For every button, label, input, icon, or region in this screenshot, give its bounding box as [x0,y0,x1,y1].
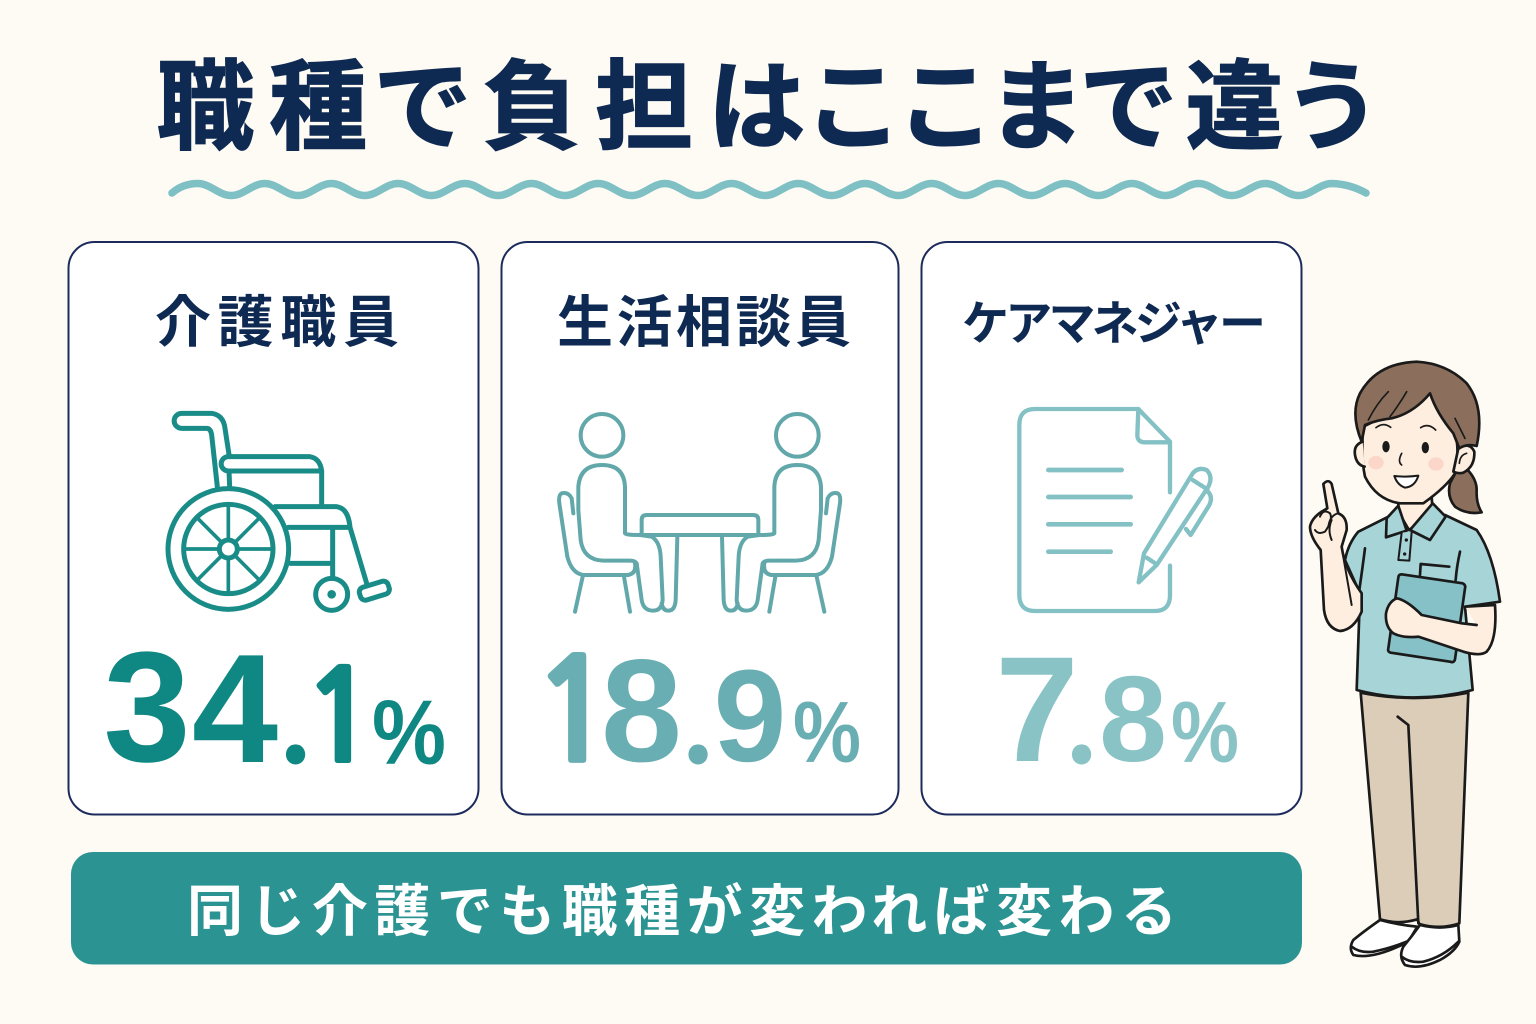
raised arm and pointing hand [1310,481,1362,631]
heading: counselor: 生活相談員 [557,291,851,354]
value: 7.8%: % [1171,685,1239,781]
pants [1361,693,1468,927]
value: 34.1%: . [278,642,313,794]
wavy underline [172,184,1366,196]
neck [1398,497,1433,530]
illustration: care worker character [1310,362,1500,967]
ponytail [1449,471,1482,513]
title: 職種で負担はここまで違う [156,52,1382,162]
value: 7.8%: 8 [1099,651,1167,787]
value: 7.8%: . [1064,642,1099,794]
value: 34.1%: 1 [302,655,378,780]
face [1362,393,1457,503]
value: 34.1%: 3 [103,620,191,795]
value: 7.8%: 7 [995,625,1079,793]
card background [922,242,1302,814]
heading: care manager: ケアマネジャー [962,297,1266,350]
icon: document and pen [1019,409,1211,611]
facial features [1368,456,1384,469]
value: 18.9%: 9 [714,642,786,789]
value: 18.9%: % [793,685,861,781]
banner [71,852,1302,964]
value: 18.9%: . [681,642,715,794]
forearm and holding hand [1386,598,1495,654]
value: 18.9% [531,629,861,794]
value: 7.8% [995,625,1239,794]
shoes [1351,920,1417,956]
panel: counselor [502,242,898,814]
value: 34.1% [103,620,446,795]
icon: two people at table [559,414,840,612]
value: 18.9%: 8 [601,629,682,792]
value: 18.9%: 1 [531,643,617,783]
collar [1386,506,1407,537]
value: 34.1%: 4 [192,622,278,795]
shirt [1345,515,1500,697]
value: 34.1%: % [372,682,446,784]
ears [1355,442,1365,467]
icon: wheelchair [168,413,391,610]
banner text: 同じ介護でも職種が変われば変わる [187,880,1177,943]
panel: care manager [922,242,1302,814]
hair [1355,362,1479,448]
card background [502,242,898,814]
panel: care worker [68,242,478,814]
heading: care worker: 介護職員 [155,291,399,354]
clipboard [1388,574,1465,662]
placket [1398,532,1412,561]
card background [68,242,478,814]
banner background [71,852,1302,964]
